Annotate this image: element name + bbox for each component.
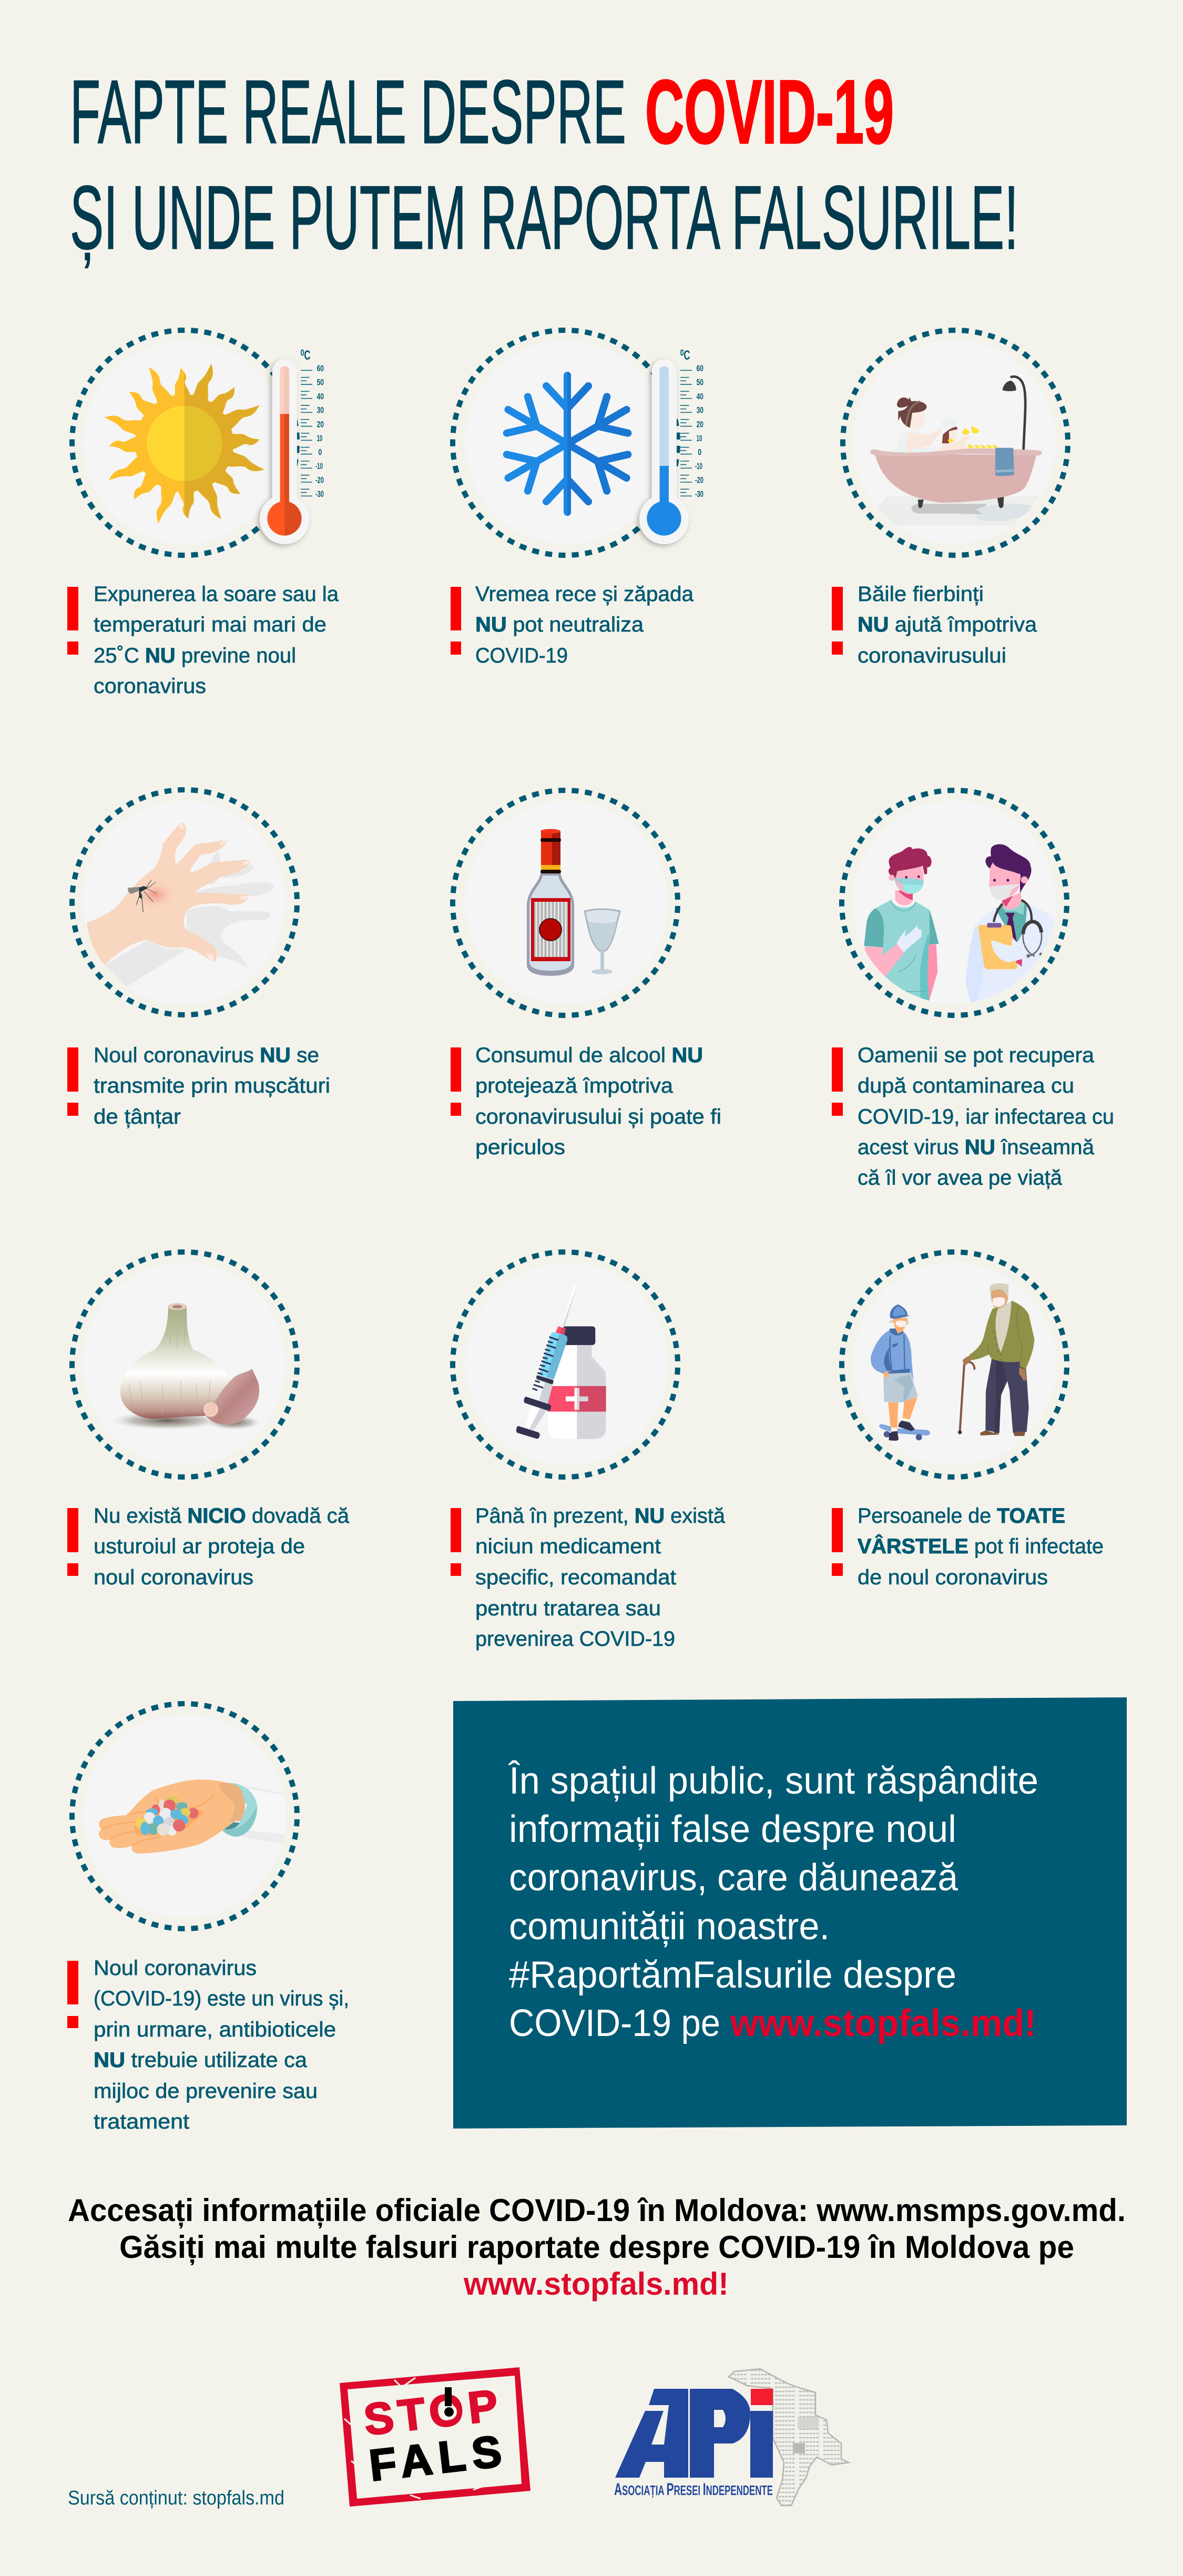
text: alcohol: coronavirusului și poate fi xyxy=(475,1105,721,1128)
icon: bottle and glass xyxy=(527,829,620,976)
text: cold: COVID-19 xyxy=(475,644,568,667)
text: all ages: de noul coronavirus xyxy=(858,1566,1048,1589)
icon: hot thermometer: ⁰C xyxy=(301,348,311,363)
badge: dashed circle xyxy=(72,790,297,1015)
title xyxy=(70,62,1018,268)
icon: cold thermometer: 60 xyxy=(697,363,703,373)
text: alcohol: periculos xyxy=(475,1136,565,1159)
card: medicine xyxy=(451,1252,726,1651)
callout text: coronavirus, care dăunează xyxy=(509,1857,958,1899)
text: sun: Expunerea la soare sau la xyxy=(94,583,339,606)
text: bath: NU ajută împotriva xyxy=(858,613,1037,636)
text: sun xyxy=(94,583,339,698)
text: antibiotics: (COVID-19) este un virus și, xyxy=(94,1987,349,2010)
icon: cold thermometer: 10 xyxy=(697,433,702,443)
text: sun: temperaturi mai mari de xyxy=(94,613,327,636)
icon: cold thermometer: 50 xyxy=(697,378,703,388)
logo: API: ASOCIAȚIA PRESEI INDEPENDENTE xyxy=(614,2480,773,2499)
icon: cold thermometer: 20 xyxy=(697,419,703,429)
title: FAPTE REALE DESPRE xyxy=(70,62,626,162)
icon: cold thermometer: 0 xyxy=(698,447,701,457)
text: mosquito: transmite prin mușcături xyxy=(94,1074,330,1097)
warning mark xyxy=(451,1508,461,1576)
text: antibiotics: Noul coronavirus xyxy=(94,1957,257,1980)
icon: snowflake xyxy=(497,375,637,512)
title: COVID-19 xyxy=(645,62,894,162)
warning mark xyxy=(832,1508,843,1576)
icon: bathtub xyxy=(870,376,1042,525)
text: cold: Vremea rece și zăpada xyxy=(475,583,694,606)
card: cold xyxy=(451,330,703,667)
text: medicine: prevenirea COVID-19 xyxy=(475,1627,675,1651)
icon: hot thermometer xyxy=(260,348,324,544)
source note: Sursă conținut: stopfals.md xyxy=(68,2487,284,2509)
icon: hot thermometer: 0 xyxy=(318,447,322,457)
warning mark xyxy=(832,1047,843,1116)
card: sun xyxy=(67,330,339,698)
text: antibiotics: mijloc de prevenire sau xyxy=(94,2080,318,2103)
text: bath: Băile fierbinți xyxy=(858,583,984,606)
icon: hot thermometer: 50 xyxy=(317,378,324,388)
icon: sun xyxy=(101,361,267,526)
text: alcohol xyxy=(475,1044,721,1159)
callout text: comunității noastre. xyxy=(509,1906,830,1948)
text: all ages xyxy=(858,1504,1104,1589)
warning mark xyxy=(451,587,461,655)
text: medicine: specific, recomandat xyxy=(475,1566,676,1589)
text: antibiotics: NU trebuie utilizate ca xyxy=(94,2049,308,2072)
icon: hand with mosquito xyxy=(87,822,274,987)
text: recovery: Oamenii se pot recupera xyxy=(858,1044,1095,1067)
panel: report callout xyxy=(453,1697,1127,2129)
text: alcohol: protejează împotriva xyxy=(475,1074,674,1097)
badge: dashed circle xyxy=(453,790,678,1015)
icon: hot thermometer: 60 xyxy=(317,363,324,373)
warning mark xyxy=(67,1961,78,2028)
icon: cold thermometer: ⁰C xyxy=(680,348,690,363)
text: recovery: că îl vor avea pe viață xyxy=(858,1166,1063,1189)
callout text xyxy=(508,1760,1038,2044)
logo: Stop Fals stamp: FALS xyxy=(366,2426,504,2490)
footer call to action: www.stopfals.md! xyxy=(463,2266,729,2302)
card: mosquito xyxy=(67,790,330,1128)
icon: elderly people xyxy=(871,1284,1034,1441)
text: garlic: Nu există NICIO dovadă că xyxy=(94,1504,350,1528)
icon: cold thermometer: -10 xyxy=(695,461,702,471)
icon: cold thermometer: 30 xyxy=(697,405,703,415)
badge: dashed circle xyxy=(842,790,1067,1015)
warning mark xyxy=(67,1047,78,1116)
icon: hot thermometer: -30 xyxy=(315,489,324,499)
text: mosquito: Noul coronavirus NU se xyxy=(94,1044,319,1067)
icon: hot thermometer: 30 xyxy=(317,405,324,415)
text: sun: 25˚C NU previne noul xyxy=(94,644,296,667)
card: garlic xyxy=(67,1252,350,1589)
text: medicine: niciun medicament xyxy=(475,1535,661,1558)
text: recovery: acest virus NU înseamnă xyxy=(858,1136,1095,1159)
badge: dashed circle xyxy=(72,330,297,555)
text: antibiotics: tratament xyxy=(94,2110,189,2133)
logo: Stop Fals stamp: STOP xyxy=(361,2380,500,2445)
warning mark xyxy=(451,1047,461,1116)
icon: hot thermometer: 40 xyxy=(317,391,324,401)
text: all ages: Persoanele de TOATE xyxy=(858,1504,1065,1528)
badge: dashed circle xyxy=(843,330,1068,555)
icon: hot thermometer: 20 xyxy=(317,419,324,429)
text: garlic xyxy=(94,1504,350,1589)
card: bath xyxy=(832,330,1068,667)
map of Moldova xyxy=(729,2369,849,2506)
text: cold: NU pot neutraliza xyxy=(475,613,644,636)
text: mosquito: de țânțar xyxy=(94,1105,181,1128)
icon: hand with pills xyxy=(99,1779,285,1854)
icon: hot thermometer: -10 xyxy=(315,461,323,471)
text: recovery: după contaminarea cu xyxy=(858,1074,1074,1097)
callout text: www.stopfals.md! xyxy=(730,2002,1036,2044)
logo: API xyxy=(614,2369,849,2506)
text: recovery xyxy=(858,1044,1114,1189)
text: medicine xyxy=(475,1504,726,1651)
text: sun: coronavirus xyxy=(94,675,206,698)
card: all ages xyxy=(832,1252,1104,1589)
badge: dashed circle xyxy=(842,1252,1067,1477)
icon: cold thermometer: 40 xyxy=(697,391,703,401)
text: garlic: usturoiul ar proteja de xyxy=(94,1535,305,1558)
callout text: COVID-19 pe xyxy=(509,2002,720,2044)
text: recovery: COVID-19, iar infectarea cu xyxy=(858,1105,1114,1128)
icon: garlic xyxy=(108,1303,262,1430)
logo: Stop Fals stamp xyxy=(340,2367,531,2507)
icon: vial and syringe xyxy=(516,1283,606,1439)
icon: cold thermometer xyxy=(639,348,703,544)
warning mark xyxy=(67,1508,78,1576)
text: antibiotics xyxy=(94,1957,349,2133)
callout text: #RaportămFalsurile despre xyxy=(509,1954,956,1996)
badge: dashed circle xyxy=(453,330,678,555)
warning mark xyxy=(67,587,78,655)
card: alcohol xyxy=(451,790,721,1159)
badge: dashed circle xyxy=(72,1704,297,1929)
text: alcohol: Consumul de alcool NU xyxy=(475,1044,703,1067)
text: medicine: pentru tratarea sau xyxy=(475,1597,661,1620)
text: bath: coronavirusului xyxy=(858,644,1006,667)
footer call to action xyxy=(68,2193,1126,2302)
icon: hot thermometer: 10 xyxy=(317,433,322,443)
text: cold xyxy=(475,583,694,667)
text: bath xyxy=(858,583,1037,667)
callout text: În spațiul public, sunt răspândite xyxy=(508,1760,1038,1802)
badge: dashed circle xyxy=(453,1252,678,1477)
warning mark xyxy=(832,587,843,655)
text: mosquito xyxy=(94,1044,330,1128)
text: garlic: noul coronavirus xyxy=(94,1566,253,1589)
footer call to action: Accesați informațiile oficiale COVID-19 în Moldova: www.msmps.gov.md. xyxy=(68,2193,1126,2228)
icon: cold thermometer: -30 xyxy=(695,489,703,499)
text: all ages: VÂRSTELE pot fi infectate xyxy=(858,1534,1104,1558)
icon: hot thermometer: -20 xyxy=(315,475,324,485)
card: antibiotics xyxy=(67,1704,349,2133)
icon: patient and doctor xyxy=(864,844,1055,1005)
callout text: informații false despre noul xyxy=(509,1808,956,1850)
footer call to action: Găsiți mai multe falsuri raportate despre COVID-19 în Moldova pe xyxy=(119,2229,1074,2265)
card: recovery xyxy=(832,790,1114,1189)
text: antibiotics: prin urmare, antibioticele xyxy=(94,2018,336,2041)
text: medicine: Până în prezent, NU există xyxy=(475,1504,726,1528)
badge: dashed circle xyxy=(72,1252,297,1477)
icon: cold thermometer: -20 xyxy=(695,475,703,485)
